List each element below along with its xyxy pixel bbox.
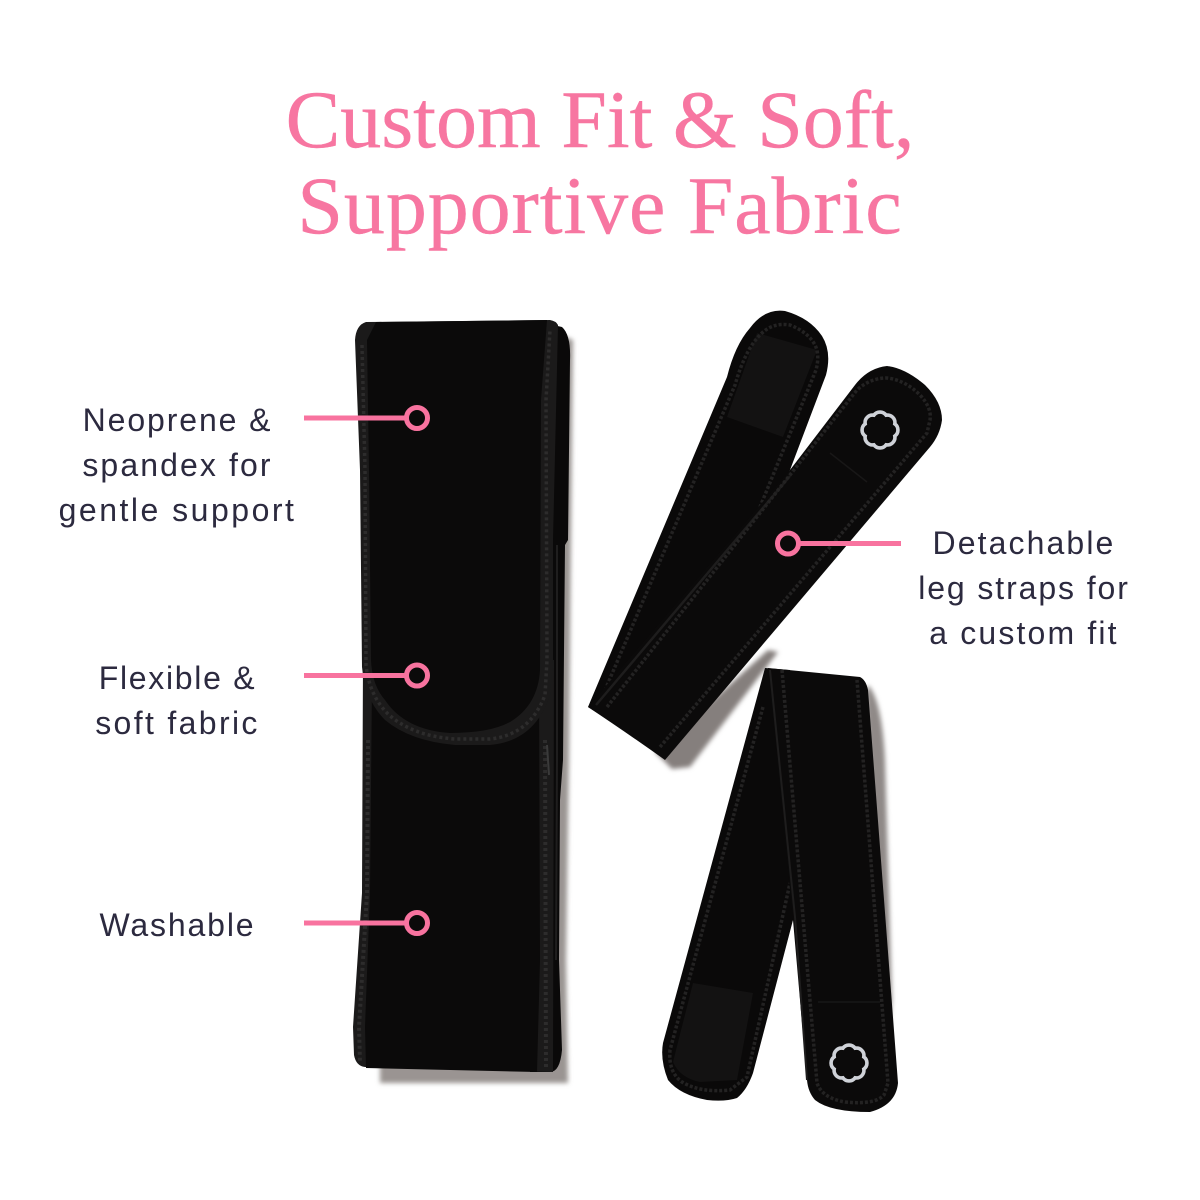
label: flexible [95, 660, 260, 741]
upper left strap [588, 311, 828, 769]
callout: detachable [778, 533, 901, 554]
velcro patch [673, 983, 753, 1082]
label: neoprene: spandex for [82, 447, 273, 483]
velcro patch [727, 333, 817, 437]
lower right strap [768, 668, 898, 1112]
title [286, 74, 914, 251]
main belt [353, 320, 573, 1083]
label: neoprene: Neoprene & [83, 402, 272, 438]
label: detachable [918, 525, 1130, 651]
callout: neoprene [304, 408, 428, 428]
label: flexible: Flexible & [99, 660, 256, 696]
title: Supportive Fabric [297, 160, 903, 251]
callout: flexible [304, 665, 428, 686]
title: Custom Fit & Soft, [286, 74, 914, 165]
icon: flower logo [862, 412, 898, 448]
label: neoprene: gentle support [59, 492, 296, 528]
label: washable: Washable [100, 907, 255, 943]
belt flap [355, 320, 558, 745]
label: detachable: Detachable [933, 525, 1115, 561]
label: detachable: leg straps for [918, 570, 1130, 606]
callout: washable [304, 912, 428, 934]
upper right strap [588, 366, 942, 760]
label: neoprene [59, 402, 296, 528]
icon: flower logo [831, 1045, 867, 1081]
lower left strap [662, 668, 800, 1101]
label: flexible: soft fabric [95, 705, 260, 741]
label: detachable: a custom fit [929, 615, 1119, 651]
